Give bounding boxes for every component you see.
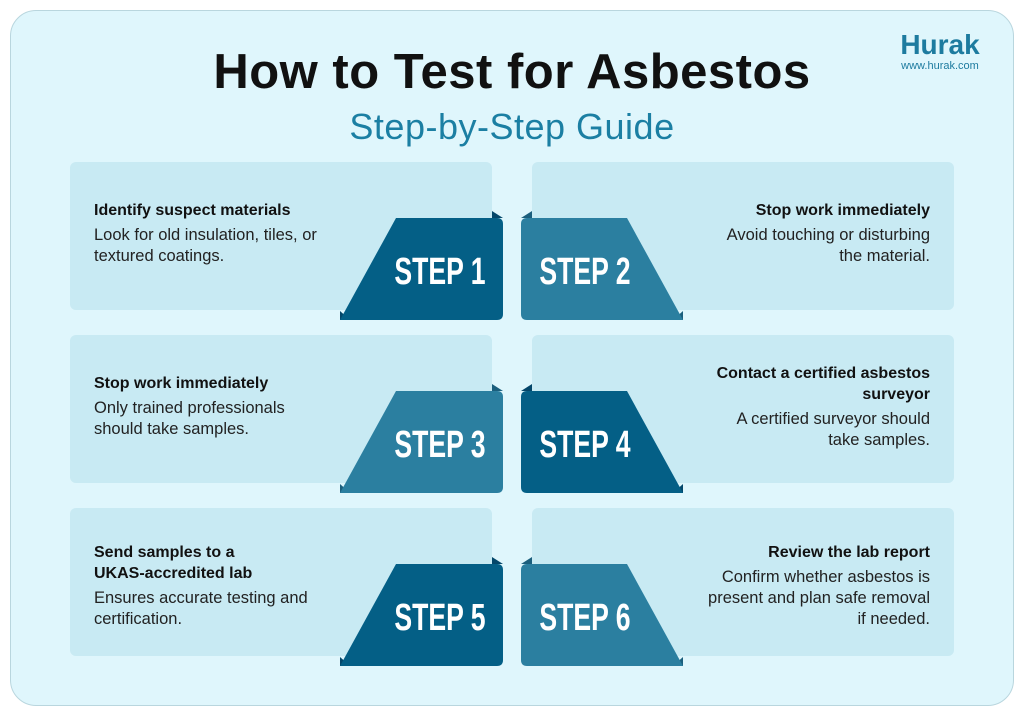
text: step 2: Avoid touching or disturbing <box>727 226 930 244</box>
logo: www.hurak.com <box>901 60 979 72</box>
panel: step 4 card <box>532 335 954 483</box>
text: step 4 <box>717 365 930 449</box>
text: step 6: Confirm whether asbestos is <box>722 568 930 586</box>
text: step 3: should take samples. <box>94 420 249 438</box>
text: step 4: A certified surveyor should <box>736 410 930 428</box>
text: step 3 <box>94 375 285 438</box>
text: step 2: the material. <box>839 247 930 265</box>
text: step 6: present and plan safe removal <box>708 589 930 607</box>
subtitle: Step-by-Step Guide <box>349 106 675 147</box>
badge: step 6 <box>521 557 683 666</box>
text: step 5: Ensures accurate testing and <box>94 589 308 607</box>
text: step 1: Identify suspect materials <box>94 202 291 219</box>
text: step 5: UKAS-accredited lab <box>94 565 252 582</box>
panel: step 1 card <box>70 162 492 310</box>
badge: step 1: STEP 1 <box>394 249 486 292</box>
text: step 5: certification. <box>94 610 182 628</box>
text: step 1: Look for old insulation, tiles, or <box>94 226 317 244</box>
text: step 1 <box>94 202 317 265</box>
badge: step 4 <box>521 384 683 493</box>
text: step 2: Stop work immediately <box>756 202 930 219</box>
text: step 3: Stop work immediately <box>94 375 268 392</box>
text: step 6: if needed. <box>858 610 930 628</box>
text: step 5: Send samples to a <box>94 544 234 561</box>
text: step 5 <box>94 544 308 628</box>
logo: Hurak <box>900 29 980 60</box>
text: step 4: take samples. <box>828 431 930 449</box>
text: step 6: Review the lab report <box>768 544 930 561</box>
text: step 3: Only trained professionals <box>94 399 285 417</box>
badge: step 3 <box>340 384 503 493</box>
panel: step 5 card <box>70 508 492 656</box>
text: step 4: Contact a certified asbestos <box>717 365 930 382</box>
text: step 6 <box>708 544 930 628</box>
text: step 2 <box>726 202 930 265</box>
badge: step 5 <box>340 557 503 666</box>
badge: step 5: STEP 5 <box>394 595 486 638</box>
badge: step 4: STEP 4 <box>539 422 631 465</box>
title: How to Test for Asbestos <box>213 45 811 99</box>
text: step 4: surveyor <box>862 386 930 403</box>
panel: step 2 card <box>532 162 954 310</box>
badge: step 6: STEP 6 <box>539 595 631 638</box>
text: step 1: textured coatings. <box>94 247 224 265</box>
panel: step 6 card <box>532 508 954 656</box>
badge: step 1 <box>340 211 503 320</box>
badge: step 2 <box>521 211 683 320</box>
panel: step 3 card <box>70 335 492 483</box>
badge: step 3: STEP 3 <box>394 422 486 465</box>
badge: step 2: STEP 2 <box>539 249 631 292</box>
